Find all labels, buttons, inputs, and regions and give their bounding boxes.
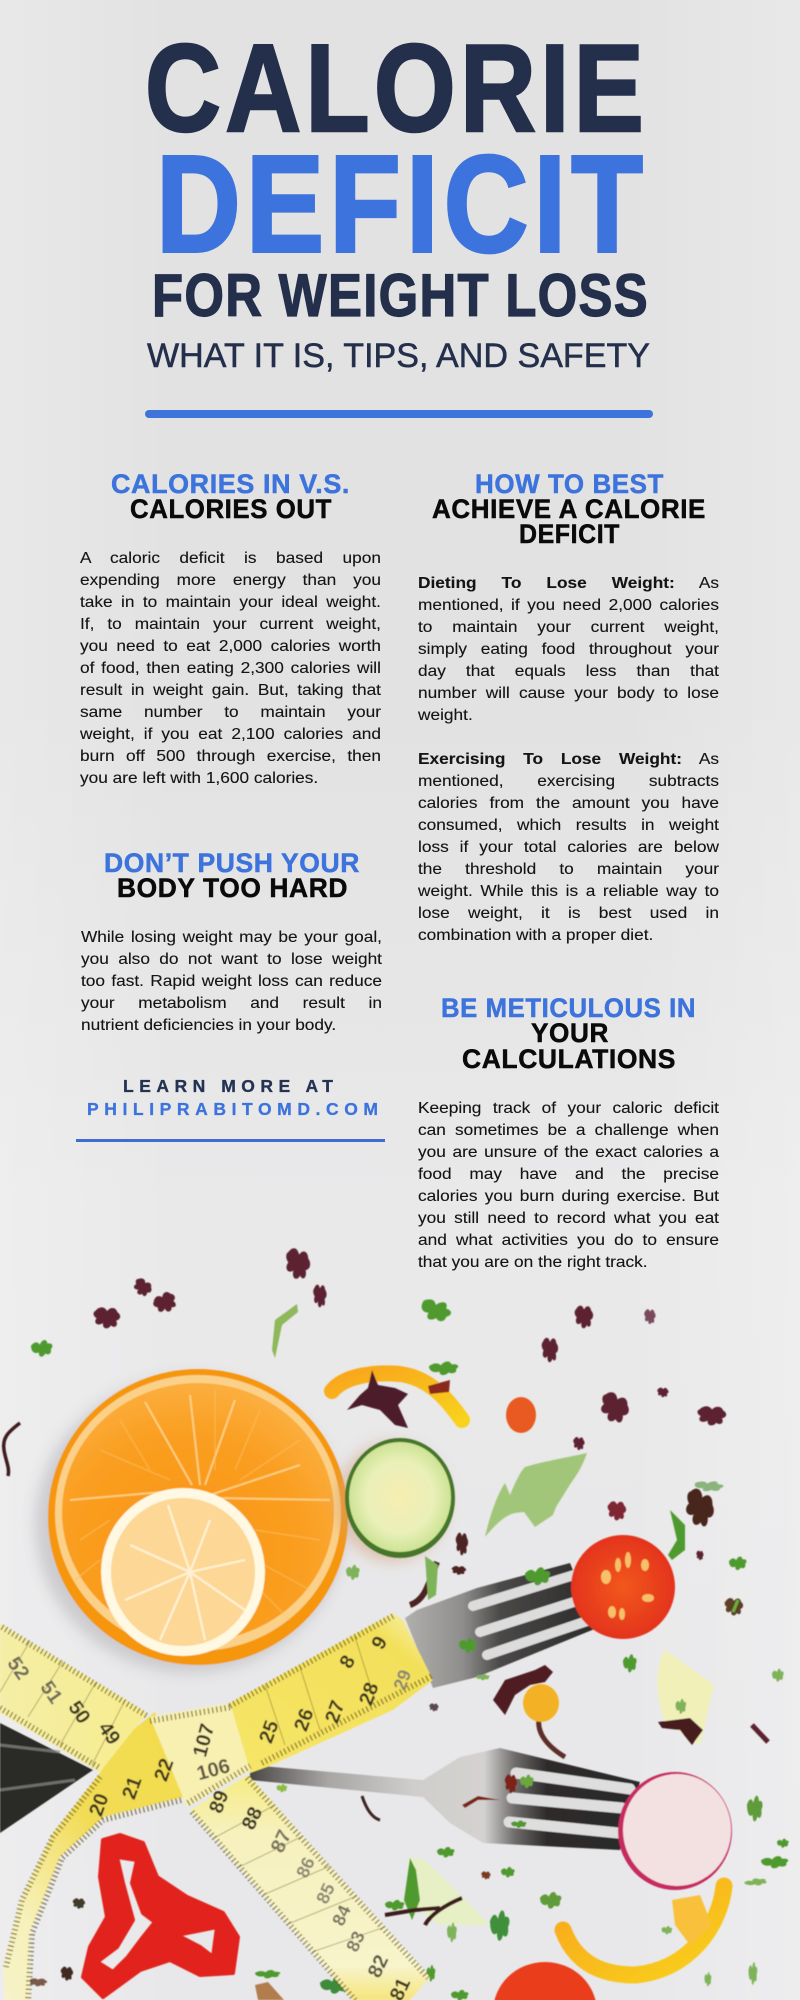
orange halves with shadows: [35, 1369, 348, 1673]
text: calories in vs out: expending more energy than you: [80, 572, 381, 588]
measuring tape: 84: [328, 1902, 355, 1929]
measuring tape: 21: [118, 1774, 147, 1802]
text: how to achieve deficit: simply eating food throughout your: [418, 640, 719, 658]
measuring tape: 28: [355, 1680, 384, 1708]
text: calories in vs out: same number to maintain your: [80, 704, 381, 720]
learn more text: LEARN MORE AT: [123, 1076, 333, 1096]
measuring tape: 86: [292, 1854, 319, 1881]
lower fork: [250, 1748, 640, 1850]
text: calories in vs out: of food, then eating 2,300 calories will: [80, 660, 381, 676]
yellow pepper bottom: [563, 1886, 724, 1975]
text: calories in vs out: take in to maintain your ideal weight.: [80, 594, 381, 610]
text: be meticulous: you still need to record what you eat: [418, 1210, 719, 1226]
title divider: [145, 410, 653, 418]
text: how to achieve deficit: day that equals less than that: [418, 662, 719, 680]
heading: be meticulous: CALCULATIONS: [462, 1044, 676, 1074]
bread crumb: [255, 1982, 284, 2000]
measuring tape: 50: [64, 1697, 94, 1728]
text: be meticulous: food may have and the precise: [418, 1166, 719, 1182]
heading: how to best: DEFICIT: [519, 519, 620, 549]
measuring tape: 83: [342, 1928, 369, 1955]
text: how to achieve deficit: weight.: [418, 706, 473, 724]
measuring tape: 25: [255, 1718, 284, 1746]
text: calories in vs out: weight, if you eat 2,100 calories and: [80, 726, 381, 742]
lemon slice: [101, 1488, 265, 1656]
tomato on fork: [405, 1535, 675, 1688]
text: calories in vs out: [80, 550, 381, 786]
heading: be meticulous: YOUR: [531, 1018, 609, 1048]
text: be meticulous: that you are on the right track.: [418, 1254, 648, 1270]
text: calories in vs out: If, to maintain your current weight,: [80, 616, 381, 632]
text: be meticulous: you are unsure of the exact calories a: [418, 1144, 719, 1160]
cucumber wedge bottom: [385, 1857, 509, 1942]
measuring tape: 85: [312, 1880, 339, 1907]
measuring tape: 9: [367, 1633, 392, 1653]
title: calorie: CALORIE: [145, 20, 648, 158]
text: how to achieve deficit: number will cause your body to lose: [418, 684, 719, 702]
measuring tape: 49: [94, 1718, 124, 1749]
text: calories in vs out: you need to eat 2,000 calories worth: [80, 638, 381, 654]
text: how to achieve deficit: lose weight, it is best used in: [418, 904, 719, 922]
radish slice: [618, 1772, 732, 1890]
measuring tape: 82: [364, 1952, 393, 1981]
text: don't push: While losing weight may be your goal,: [81, 928, 382, 946]
red pepper ring: [83, 1835, 238, 1997]
website: PHILIPRABITOMD.COM: [87, 1099, 378, 1119]
measuring tape: 20: [85, 1791, 114, 1819]
heading: how to best: [432, 469, 706, 549]
arugula leaf: [485, 1453, 587, 1537]
scattered dark herb pieces: [4, 1247, 768, 1986]
title: for weight loss: FOR WEIGHT LOSS: [152, 262, 649, 329]
measuring tape: 106: [194, 1755, 232, 1785]
heading: don't push: [104, 848, 360, 903]
heading: be meticulous: BE METICULOUS IN: [441, 993, 696, 1023]
text: don't push: you also do not want to lose weight: [81, 950, 382, 968]
text: how to achieve deficit: Exercising To Lose Weight: As: [418, 750, 719, 768]
measuring tape: 88: [238, 1804, 267, 1833]
text: don't push: nutrient deficiencies in your body.: [81, 1016, 336, 1034]
measuring tape: 52: [3, 1653, 33, 1684]
text: don't push: your metabolism and result in: [81, 994, 382, 1012]
bottom tomato: [493, 1962, 597, 2000]
measuring tape: 8: [335, 1652, 360, 1672]
measuring tape: 89: [205, 1788, 234, 1816]
text: be meticulous: calories you burn during exercise. But: [418, 1188, 719, 1204]
text: be meticulous: Keeping track of your caloric deficit: [418, 1100, 719, 1116]
text: how to achieve deficit: mentioned, if you need 2,000 calories: [418, 596, 719, 614]
text: how to achieve deficit: calories from the amount you have: [418, 794, 719, 812]
text: be meticulous: [418, 1100, 720, 1270]
text: how to achieve deficit: combination with a proper diet.: [418, 926, 653, 944]
heading: calories in vs out: CALORIES IN V.S.: [111, 469, 350, 499]
subtitle: WHAT IT IS, TIPS, AND SAFETY: [147, 337, 650, 375]
heading: calories in vs out: [111, 469, 350, 524]
heading: don't push: DON’T PUSH YOUR: [104, 848, 360, 878]
text: how to achieve deficit: weight. While this is a reliable way to: [418, 882, 719, 900]
scattered green herb pieces: [31, 1294, 789, 2000]
text: how to achieve deficit: Dieting To Lose Weight: As: [418, 574, 719, 592]
heading: be meticulous: [441, 993, 696, 1074]
text: calories in vs out: you are left with 1,600 calories.: [80, 770, 318, 786]
text: be meticulous: can sometimes be a challenge when: [418, 1122, 719, 1138]
text: don't push: too fast. Rapid weight loss can reduce: [81, 972, 382, 990]
heading: how to best: ACHIEVE A CALORIE: [432, 494, 706, 524]
measuring tape: 27: [321, 1698, 350, 1726]
herbs on fork: [459, 1567, 550, 1680]
text: how to achieve deficit: mentioned, exercising subtracts: [418, 772, 719, 790]
text: calories in vs out: A caloric deficit is based upon: [80, 550, 381, 566]
cucumber slice: [336, 1438, 455, 1562]
goji berry: [506, 1397, 536, 1433]
text: how to achieve deficit: [418, 574, 720, 944]
text: don't push: [81, 928, 382, 1034]
measuring tape: 29: [390, 1667, 415, 1693]
text: calories in vs out: result in weight gain. But, taking that: [80, 682, 381, 698]
text: how to achieve deficit: to maintain your current weight,: [418, 618, 719, 636]
measuring tape: 87: [267, 1827, 296, 1856]
measuring tape: [0, 1613, 433, 2000]
measuring tape: 107: [189, 1721, 219, 1759]
text: how to achieve deficit: the threshold to maintain your: [418, 860, 719, 878]
measuring tape: 22: [150, 1756, 179, 1784]
text: how to achieve deficit: consumed, which results in weight: [418, 816, 719, 834]
text: calories in vs out: burn off 500 through exercise, then: [80, 748, 381, 764]
callout divider: [76, 1139, 385, 1142]
dark fork handles at left: [0, 1723, 93, 1833]
fruit and herbs near fork: [523, 1650, 714, 1745]
text: be meticulous: and what activities you do to ensure: [418, 1232, 719, 1248]
heading: don't push: BODY TOO HARD: [117, 873, 348, 903]
heading: calories in vs out: CALORIES OUT: [130, 494, 332, 524]
measuring tape: 26: [290, 1706, 319, 1734]
yellow pepper top: [332, 1370, 462, 1428]
text: how to achieve deficit: loss if your total calories are below: [418, 838, 719, 856]
heading: how to best: HOW TO BEST: [475, 469, 664, 499]
measuring tape: 51: [36, 1677, 66, 1708]
title: deficit: DEFICIT: [156, 128, 648, 282]
